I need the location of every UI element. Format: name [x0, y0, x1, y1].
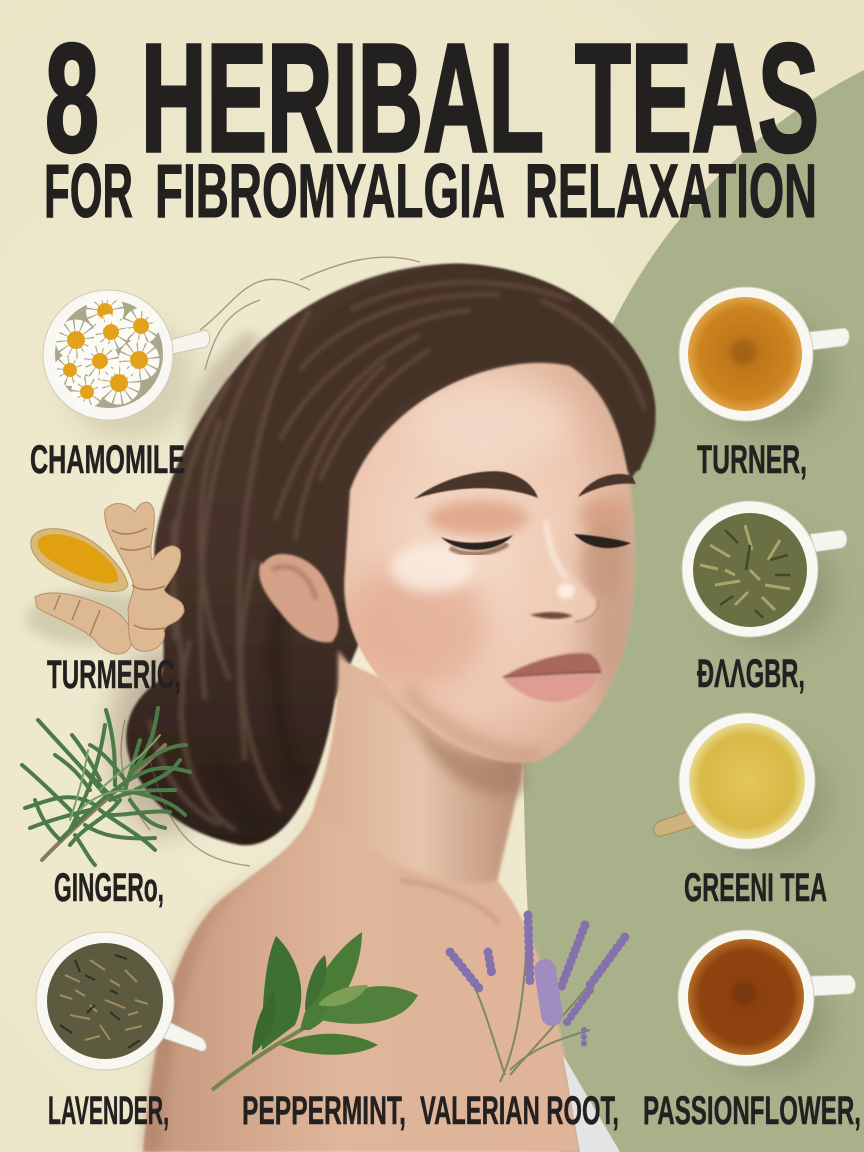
- icon: lavender sprigs: [450, 915, 625, 1082]
- left eyebrow: [414, 471, 538, 499]
- chamomile flowers: [59, 298, 153, 403]
- cup: lavender blend: [36, 932, 206, 1070]
- green curved panel: [524, 70, 864, 1152]
- face: [344, 363, 634, 763]
- title line 1: 8: [45, 12, 99, 184]
- label: chamomile: CHAMOMILE: [30, 438, 185, 482]
- right eyebrow: [578, 474, 636, 497]
- icon: rosemary sprig: [22, 708, 190, 865]
- cup: turner amber tea: [679, 287, 849, 435]
- label: valerian root: VALERIAN ROOT,: [420, 1089, 619, 1133]
- nose: [528, 515, 598, 625]
- cup: green leaf tea: [682, 501, 847, 645]
- label: ginger: GINGERo,: [54, 866, 164, 910]
- ear: [259, 554, 339, 642]
- icon: turmeric and ginger: [25, 502, 184, 654]
- label: turmeric: TURMERIC,: [47, 653, 181, 697]
- ginger root: [35, 502, 184, 654]
- woman illustration: [110, 257, 655, 1152]
- cup: passionflower dark tea: [678, 930, 856, 1075]
- right closed eye: [574, 534, 631, 548]
- title line 1: HERIBAL: [141, 12, 544, 184]
- back hair: [110, 257, 655, 866]
- shoulder and back: [143, 660, 580, 1152]
- spoon of turmeric: [31, 529, 128, 592]
- cup: chamomile: [43, 290, 210, 440]
- lips: [503, 653, 601, 702]
- title: [44, 12, 819, 234]
- ginger bands: [54, 528, 165, 635]
- label: lavender: LAVENDER,: [48, 1089, 169, 1133]
- neck shading: [315, 650, 526, 883]
- left closed eye: [441, 535, 513, 554]
- icon: peppermint sprig: [212, 932, 418, 1090]
- label: peppermint: PEPPERMINT,: [242, 1089, 406, 1133]
- facial shading: [343, 385, 638, 756]
- front hair: [257, 264, 655, 575]
- title line 2: FIBROMYALGIA: [155, 149, 505, 234]
- back shadow: [143, 805, 315, 1152]
- lace garment: [563, 1055, 620, 1152]
- cup: yellow green tea: [654, 713, 830, 855]
- title line 2: FOR: [44, 149, 133, 234]
